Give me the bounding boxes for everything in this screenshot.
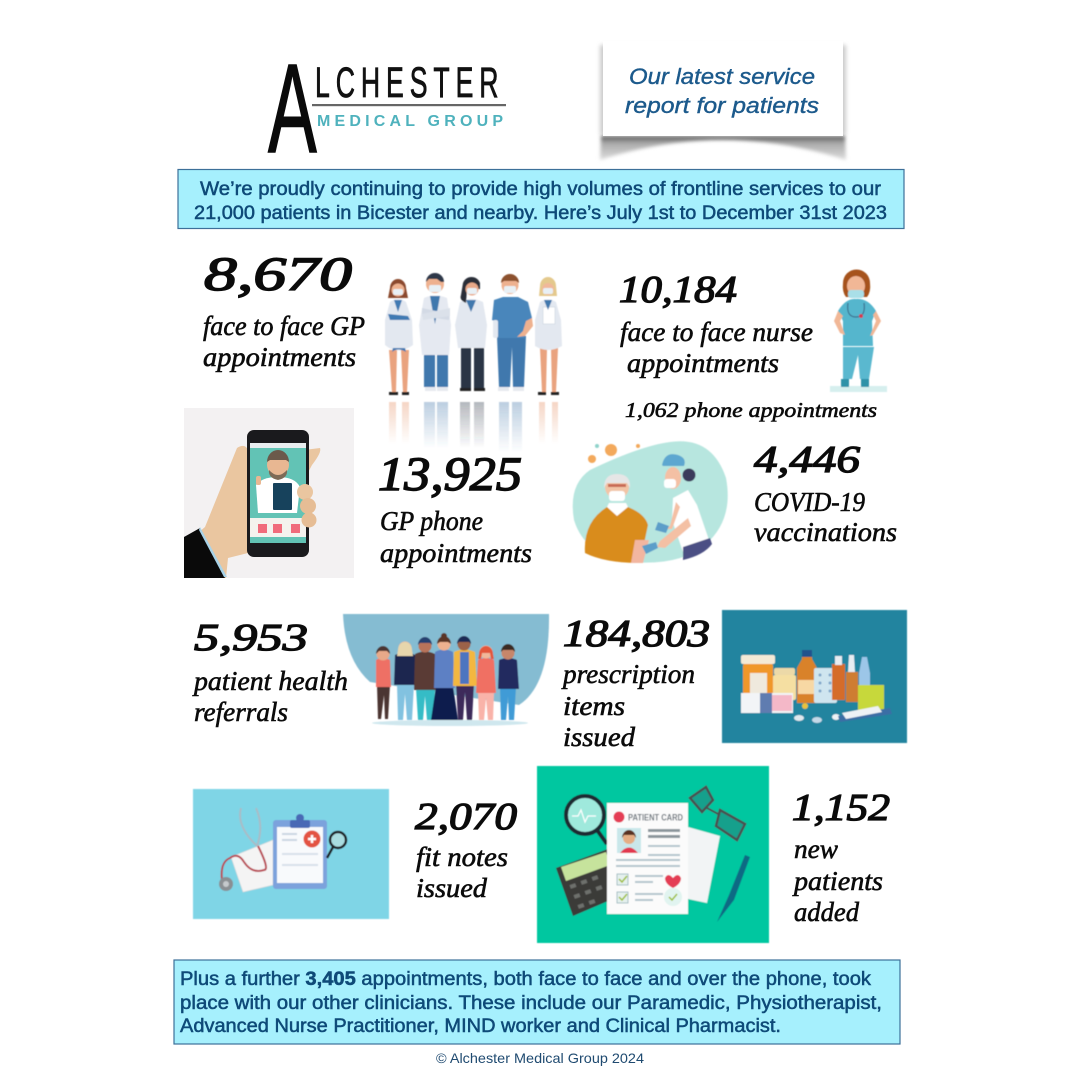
stat: prescription items issued (561, 613, 710, 752)
stat: prescription items issued: prescription (561, 659, 695, 689)
stat: GP phone appointments (378, 448, 532, 568)
illustration: patient card: PATIENT CARD (628, 812, 683, 824)
clinician 2 (419, 273, 451, 391)
logo: A (268, 38, 317, 179)
card (607, 803, 688, 914)
illustration: nurse (830, 269, 887, 392)
stat: face to face nurse appointments: face to face nurse (620, 317, 813, 347)
reflection (389, 402, 558, 452)
stat: face to face nurse appointments: appointments (627, 348, 779, 378)
stat: new patients added: 1,152 (792, 787, 890, 829)
clinician 4 (492, 274, 533, 391)
notepad (231, 840, 273, 892)
fingers (297, 484, 313, 500)
person 4 (431, 633, 458, 720)
blister pack (814, 668, 837, 703)
stat: GP phone appointments: 13,925 (378, 448, 522, 501)
stat: patient health referrals: 5,953 (194, 617, 308, 659)
stat: fit notes issued: fit notes (416, 842, 508, 872)
hand (184, 446, 248, 578)
stethoscope (240, 808, 260, 846)
illustration: patient card (537, 766, 769, 943)
illustration: five clinicians with reflection (385, 273, 562, 452)
nurse (672, 490, 710, 552)
logo: MEDICAL GROUP (317, 113, 503, 130)
illustration: group of patients (343, 614, 549, 726)
stat: covid vaccinations: COVID-19 (754, 487, 865, 517)
closing note (174, 960, 900, 1044)
stat: patient health referrals: patient health (192, 666, 348, 696)
ribbon callout: service report: Our latest service (629, 64, 815, 89)
stat: covid vaccinations: vaccinations (754, 517, 897, 547)
stat: fit notes issued: issued (416, 873, 488, 903)
stat: prescription items issued: items (563, 691, 625, 721)
stat: new patients added: new (794, 834, 838, 864)
orange bottle (743, 663, 773, 699)
thermometer (838, 708, 892, 722)
phone (247, 430, 309, 557)
intro banner (178, 170, 904, 228)
stat: face to face nurse appointments (619, 269, 877, 422)
stat: face to face GP appointments: face to face GP (203, 311, 365, 341)
stat: prescription items issued: issued (563, 722, 636, 752)
illustration: medicines (722, 610, 907, 743)
stat: prescription items issued: 184,803 (563, 613, 710, 655)
illustration: covid vaccination (573, 441, 728, 563)
spray bottles (832, 664, 845, 700)
patient (585, 507, 648, 563)
clinician 1 (385, 279, 413, 395)
clinician 3 (455, 277, 487, 391)
stat: GP phone appointments: appointments (380, 538, 532, 568)
glasses (690, 787, 745, 840)
ribbon callout: service report (600, 41, 846, 160)
stat: face to face nurse appointments: 10,184 (619, 269, 737, 311)
intro banner: We’re proudly continuing to provide high volumes of frontline services to our (200, 179, 882, 200)
illustration: fit note clipboard (193, 789, 389, 919)
stat: face to face GP appointments (203, 248, 365, 372)
closing note: place with our other clinicians. These include our Paramedic, Physiotherapist, (180, 993, 882, 1014)
person 6 (476, 646, 496, 720)
stat: face to face GP appointments: appointments (203, 342, 356, 372)
stat: face to face GP appointments: 8,670 (204, 248, 352, 301)
person 7 (498, 644, 519, 720)
pills (794, 715, 804, 721)
pill box (741, 693, 793, 713)
magnifier (330, 832, 346, 848)
stat: face to face nurse appointments: 1,062 phone appointments (625, 398, 877, 422)
logo: LCHESTER (315, 59, 499, 107)
ribbon callout: service report: report for patients (625, 93, 819, 118)
person 5 (453, 636, 477, 720)
person 3 (414, 637, 436, 720)
notepad (688, 827, 720, 903)
stat: new patients added: patients (792, 866, 883, 896)
clipboard (273, 820, 327, 889)
calculator (556, 849, 622, 916)
person 2 (394, 642, 416, 720)
stat: new patients added (792, 787, 890, 927)
stat: fit notes issued (415, 796, 517, 903)
stat: patient health referrals (192, 617, 348, 727)
pen (717, 855, 750, 922)
doctor on screen (256, 477, 300, 513)
stat: covid vaccinations: 4,446 (754, 439, 860, 481)
stat: fit notes issued: 2,070 (415, 796, 517, 838)
stat: patient health referrals: referrals (194, 697, 288, 727)
magnifier (597, 830, 607, 844)
stat: covid vaccinations (754, 439, 897, 547)
illustration: phone consultation (184, 408, 354, 578)
intro banner: 21,000 patients in Bicester and nearby. Here’s July 1st to December 31st 2023 (194, 203, 887, 224)
stat: new patients added: added (794, 897, 859, 927)
jar (773, 675, 796, 700)
person 1 (376, 646, 391, 719)
brown bottle (797, 655, 817, 703)
stat: GP phone appointments: GP phone (380, 506, 483, 536)
clinician 5 (535, 277, 562, 395)
closing note: Plus a further 3,405 appointments, both face to face and over the phone, took (180, 969, 872, 990)
closing note: Advanced Nurse Practitioner, MIND worker and Clinical Pharmacist. (180, 1016, 781, 1037)
logo (268, 38, 506, 179)
footer: © Alchester Medical Group 2024 (436, 1050, 644, 1066)
